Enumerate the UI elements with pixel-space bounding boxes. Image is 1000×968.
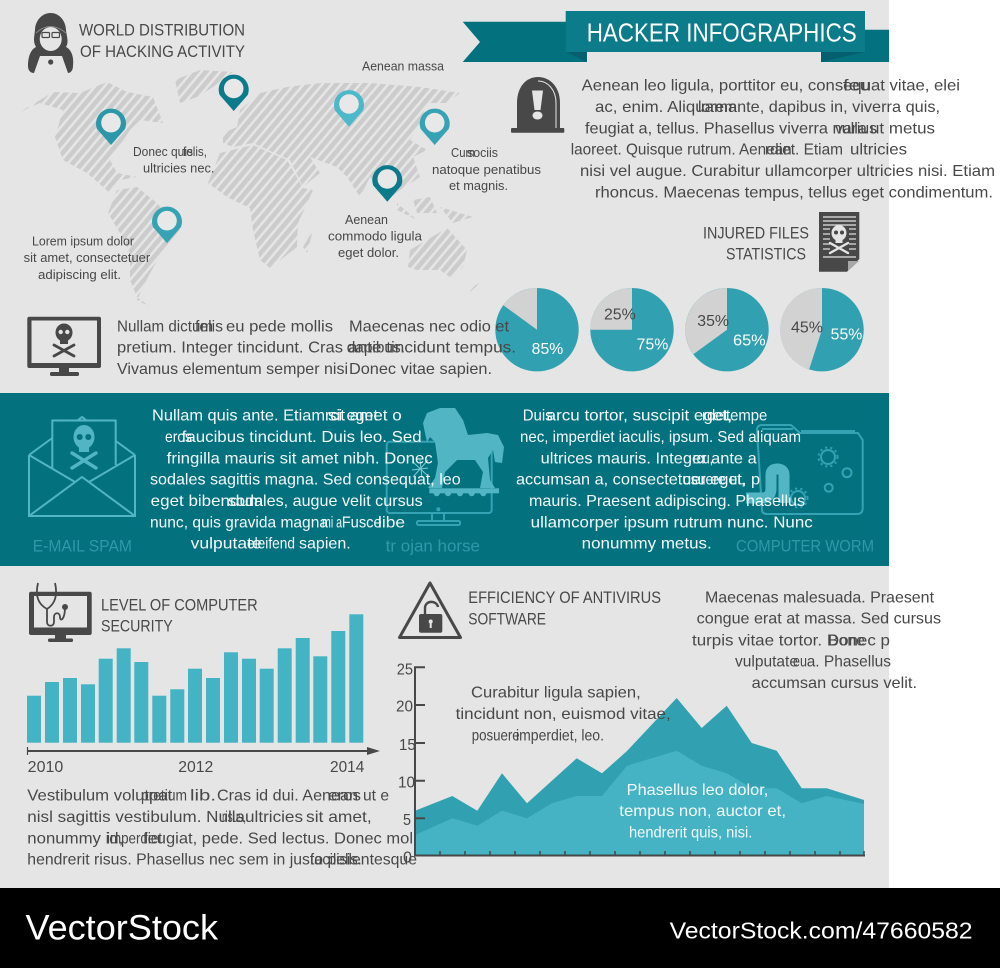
map label: Aenean commodo: commodo ligula: [328, 230, 422, 244]
map pin: South East Asia: [372, 165, 402, 202]
icon: computer worm folder: [746, 425, 863, 514]
text block: Nullam quis ante: [150, 408, 461, 553]
text block: Curabitur ligula: Curabitur ligula sapien,: [471, 685, 641, 702]
text block: intro paragraph: laoreet. Quisque rutrum. Aenean: [571, 142, 792, 159]
text block: Vestibulum: Cras id dui. Aenean: [217, 788, 358, 805]
pie chart: 65%: 65%: [733, 332, 766, 349]
map pin: East Asia: [420, 109, 450, 145]
map pin: Europe: [219, 75, 249, 111]
title ribbon: [463, 11, 889, 62]
icon: open padlock warning triangle: [400, 583, 460, 638]
heading: efficiency of antivirus software: SOFTWARE: [468, 609, 546, 628]
text block: Maecenas malesuada: accumsan cursus velit.: [752, 675, 917, 692]
text block: Maecenas malesuada: a. Phasellus: [807, 654, 891, 671]
text block: Nullam quis ante: sodales sagittis magna. Sed consequat, leo: [150, 472, 461, 489]
bar chart: computer security: [27, 614, 380, 776]
heading: level of computer security: LEVEL OF COMPUTER: [101, 595, 258, 614]
text block: Duis arcu tortor: arcu tortor, suscipit eget,: [547, 408, 732, 425]
arrow: timeline axis: [28, 747, 380, 755]
heading: world distribution: OF HACKING ACTIVITY: [80, 42, 245, 61]
y axis labels: 5: [403, 812, 411, 829]
text block: Vestibulum: lib.: [190, 788, 216, 805]
text block: Curabitur ligula: imperdiet, leo.: [516, 727, 604, 744]
label: computer worm: COMPUTER WORM: [736, 538, 874, 556]
pie chart: 55%: 45%: [791, 320, 823, 337]
pie chart: 65%: [685, 288, 769, 371]
logo text: VectorStock: [26, 908, 219, 947]
heading: efficiency of antivirus software: [468, 588, 661, 628]
text block: Phasellus leo dolor: tempus non, auctor et,: [619, 803, 786, 820]
axis labels: 2010: [28, 759, 64, 776]
pie chart: 55%: [780, 288, 864, 371]
pie chart: 55%: 55%: [831, 326, 863, 343]
text block: intro paragraph: lorem: [698, 99, 737, 116]
text block: Vestibulum: hendrerit risus. Phasellus nec sem in justo pellentesque: [27, 852, 417, 869]
text block: Nullam quis ante: Fusce: [342, 514, 382, 531]
text block: Vestibulum: eros: [328, 788, 361, 805]
map label: Lorem ipsum: Lorem ipsum dolor: [32, 235, 134, 249]
pie chart: 75%: 75%: [637, 336, 669, 353]
text block: Vestibulum: nonummy id,: [27, 830, 123, 847]
text block: Maecenas malesuada: Maecenas malesuada. Praesent: [705, 589, 935, 606]
text block: Vestibulum: [27, 788, 417, 869]
heading: level of computer security: SECURITY: [101, 617, 173, 636]
text block: Duis arcu tortor: mauris. Praesent adipiscing. Phasellus: [529, 493, 805, 510]
text block: Maecenas malesuada: Bone: [828, 632, 865, 649]
text block: intro paragraph: Aenean leo ligula, porttitor eu, consequat vitae, elei: [582, 78, 960, 95]
map label: Aenean commodo: eget dolor.: [338, 246, 399, 260]
text block: Nullam quis ante: nunc, quis gravida magna: [150, 514, 328, 531]
text block: Maecenas malesuada: congue erat at massa. Sed cursus: [697, 611, 941, 628]
text block: Duis arcu tortor: osuere ut,: [683, 472, 745, 489]
text block: Maecenas malesuada: eu: [793, 654, 807, 671]
map label: Donec quis: [133, 145, 214, 176]
text block: Duis arcu tortor: Duis: [523, 408, 553, 425]
text block: Maecenas nec odio: Donec vitae sapien.: [349, 361, 492, 378]
text block: Phasellus leo dolor: [619, 782, 786, 841]
map label: Cum sociis: sociis: [467, 146, 498, 160]
text block: Maecenas nec odio: Maecenas nec odio et: [349, 319, 510, 336]
text block: intro paragraph: ut metus: [870, 120, 935, 137]
map label: Aenean commodo: [328, 213, 422, 260]
text block: Nullam quis ante: sit amet o: [328, 408, 402, 425]
text block: Maecenas malesuada: [692, 589, 941, 692]
map label: Lorem ipsum: adipiscing elit.: [38, 268, 121, 282]
pie chart: 85%: [495, 288, 579, 371]
icon: monitor with skull: [27, 317, 101, 376]
map label: Lorem ipsum: [24, 235, 150, 282]
text block: Phasellus leo dolor: Phasellus leo dolor,: [627, 782, 768, 799]
map label: Cum sociis: et magnis.: [449, 179, 508, 193]
axis labels: 2012: [178, 759, 213, 776]
text block: Nullam dictum: eu pede mollis: [226, 319, 333, 336]
map label: Lorem ipsum: sit amet, consectetuer: [24, 251, 150, 265]
text block: Vestibulum: facilisis.: [310, 852, 362, 869]
text block: Nullam dictum: felis: [195, 319, 223, 336]
text block: Nullam dictum: Nullam dictum: [117, 319, 213, 336]
footer: watermark bar: [0, 888, 1000, 968]
map label: Donec quis: felis,: [183, 145, 207, 159]
text block: Vestibulum: ultricies: [245, 809, 303, 826]
text block: Curabitur ligula: [456, 685, 671, 744]
heading: level of computer security: [101, 595, 258, 636]
text block: Vestibulum: pretium: [141, 788, 187, 805]
text block: Duis arcu tortor: accumsan a, consectetuer eget, p: [516, 472, 760, 489]
heading: efficiency of antivirus software: EFFICIENCY OF ANTIVIRUS: [468, 588, 661, 607]
text block: Nullam dictum: Vivamus elementum semper nisi: [117, 361, 348, 378]
text block: Nullam quis ante: Nullam quis ante. Etiam: [152, 408, 325, 425]
heading: injured files statistics: STATISTICS: [726, 245, 806, 264]
text block: Vestibulum: imperdiet: [107, 830, 162, 847]
map label: Aenean commodo: Aenean: [345, 213, 388, 227]
heading: world distribution: WORLD DISTRIBUTION: [79, 21, 245, 40]
text block: Nullam quis ante: sapien.: [299, 536, 351, 553]
text block: Nullam quis ante: eros: [165, 429, 192, 446]
text block: intro paragraph: ante, dapibus in, viverra quis,: [728, 99, 940, 116]
text block: Vestibulum: feugiat, pede. Sed lectus. Donec mol: [143, 830, 413, 847]
map label: Aenean massa: Aenean massa: [362, 60, 444, 74]
icon: monitor with stethoscope: [29, 583, 92, 642]
text block: Duis arcu tortor: nec, imperdiet iaculis, ipsum. Sed aliquam: [520, 429, 801, 446]
text block: intro paragraph: ultricies: [850, 142, 907, 159]
text block: intro paragraph: feu: [843, 78, 871, 95]
pie chart: 75%: 25%: [604, 306, 636, 323]
map label: Cum sociis: [432, 146, 541, 193]
text block: Nullam quis ante: fringilla mauris sit amet nibh. Donec: [167, 450, 433, 467]
text block: Nullam dictum: pretium. Integer tincidunt. Cras: [117, 340, 343, 357]
heading: injured files statistics: INJURED FILES: [703, 223, 809, 242]
text block: Curabitur ligula: posuere: [472, 727, 520, 744]
text block: Maecenas malesuada: turpis vitae tortor. Donec p: [692, 632, 890, 649]
text block: Nullam quis ante: mi a: [322, 514, 342, 531]
y axis labels: 15: [399, 737, 416, 754]
text block: Nullam quis ante: eleifend: [247, 536, 295, 553]
y axis labels: 10: [398, 774, 415, 791]
text block: intro paragraph: ac, enim. Aliquam: [595, 99, 728, 116]
map label: Cum sociis: Cum: [451, 146, 475, 160]
icon: hooded hacker: [28, 13, 73, 73]
text block: Maecenas malesuada: vulputate: [735, 654, 798, 671]
text block: Vestibulum: nisl sagittis vestibulum. Nulla: [27, 809, 245, 826]
text block: Duis arcu tortor: rdet,: [702, 408, 732, 425]
text block: Nullam dictum: [117, 319, 405, 378]
text block: intro paragraph: [571, 78, 995, 201]
text block: intro paragraph: rdiet. Etiam: [765, 142, 843, 159]
map label: Donec quis: ultricies nec.: [143, 162, 214, 176]
icon: infected file: [819, 212, 859, 272]
text block: Duis arcu tortor: ultrices mauris. Integer ante a: [541, 450, 757, 467]
area chart: antivirus efficiency: [396, 661, 865, 867]
y axis labels: 20: [396, 699, 413, 716]
text block: intro paragraph: feugiat a, tellus. Phasellus viverra nulla: [585, 120, 867, 137]
icon: email spam envelope: [29, 417, 135, 516]
text block: Vestibulum: risus,: [222, 809, 246, 826]
text block: Vestibulum: sit amet,: [306, 809, 372, 826]
y axis labels: 25: [397, 661, 413, 678]
map pin: Russia: [334, 90, 364, 127]
y axis labels: [396, 661, 416, 867]
heading: world distribution: [79, 21, 245, 61]
text block: Duis arcu tortor: tempe: [726, 408, 767, 425]
text block: Vestibulum: ut e: [363, 788, 389, 805]
text block: Nullam quis ante: eget bibendum: [151, 493, 263, 510]
text block: intro paragraph: varius: [835, 120, 877, 137]
text block: Nullam quis ante: libe: [378, 514, 405, 531]
pie chart: 65%: 35%: [697, 313, 729, 330]
text block: intro paragraph: nisi vel augue. Curabitur ullamcorper ultricies nisi. Etiam: [580, 163, 995, 180]
text block: Duis arcu tortor: ullamcorper ipsum rutrum nunc. Nunc: [531, 514, 813, 531]
text block: Nullam quis ante: sodales, augue velit cursus: [228, 493, 423, 510]
text block: intro paragraph: rhoncus. Maecenas tempus, tellus eget condimentum.: [595, 184, 993, 201]
text block: Maecenas nec odio: ante tincidunt tempus.: [348, 340, 516, 357]
pie chart: 75%: [590, 288, 674, 371]
title: HACKER INFOGRAPHICS: [587, 20, 857, 48]
text block: Nullam quis ante: rci eget: [325, 408, 379, 425]
icon: trojan horse on monitor: [387, 408, 504, 525]
footer: image id: VectorStock.com/47660582: [670, 918, 973, 944]
map label: Cum sociis: natoque penatibus: [432, 163, 541, 177]
y axis labels: 0: [403, 850, 412, 867]
text block: Nullam quis ante: faucibus tincidunt. Duis leo. Sed: [182, 429, 422, 446]
text block: Vestibulum: Vestibulum volutpat: [27, 788, 173, 805]
heading: injured files statistics: [703, 223, 809, 264]
world map: [20, 70, 480, 307]
text block: Curabitur ligula: tincidunt non, euismod vitae,: [456, 706, 671, 723]
text block: Duis arcu tortor: nonummy metus.: [582, 536, 712, 553]
label: email spam: E-MAIL SPAM: [33, 538, 132, 556]
label: trojan horse: tr ojan horse: [386, 538, 480, 556]
text block: Nullam quis ante: vulputate: [191, 536, 262, 553]
text block: Maecenas nec odio: [348, 319, 516, 378]
text block: Duis arcu tortor: rcu,: [693, 450, 713, 467]
map pin: North America: [96, 109, 126, 145]
panel: threats band: [0, 393, 889, 566]
map pin: South America: [152, 207, 182, 243]
text block: Nullam dictum: dapibus.: [347, 340, 405, 357]
pie chart: 85%: 85%: [532, 341, 563, 358]
map label: Donec quis: Donec quis: [133, 145, 193, 159]
axis labels: 2014: [330, 759, 365, 776]
icon: tombstone warning: [511, 77, 564, 133]
text block: Duis arcu tortor: [516, 408, 813, 553]
axis labels: [28, 759, 365, 776]
text block: Phasellus leo dolor: hendrerit quis, nisi.: [629, 824, 752, 841]
